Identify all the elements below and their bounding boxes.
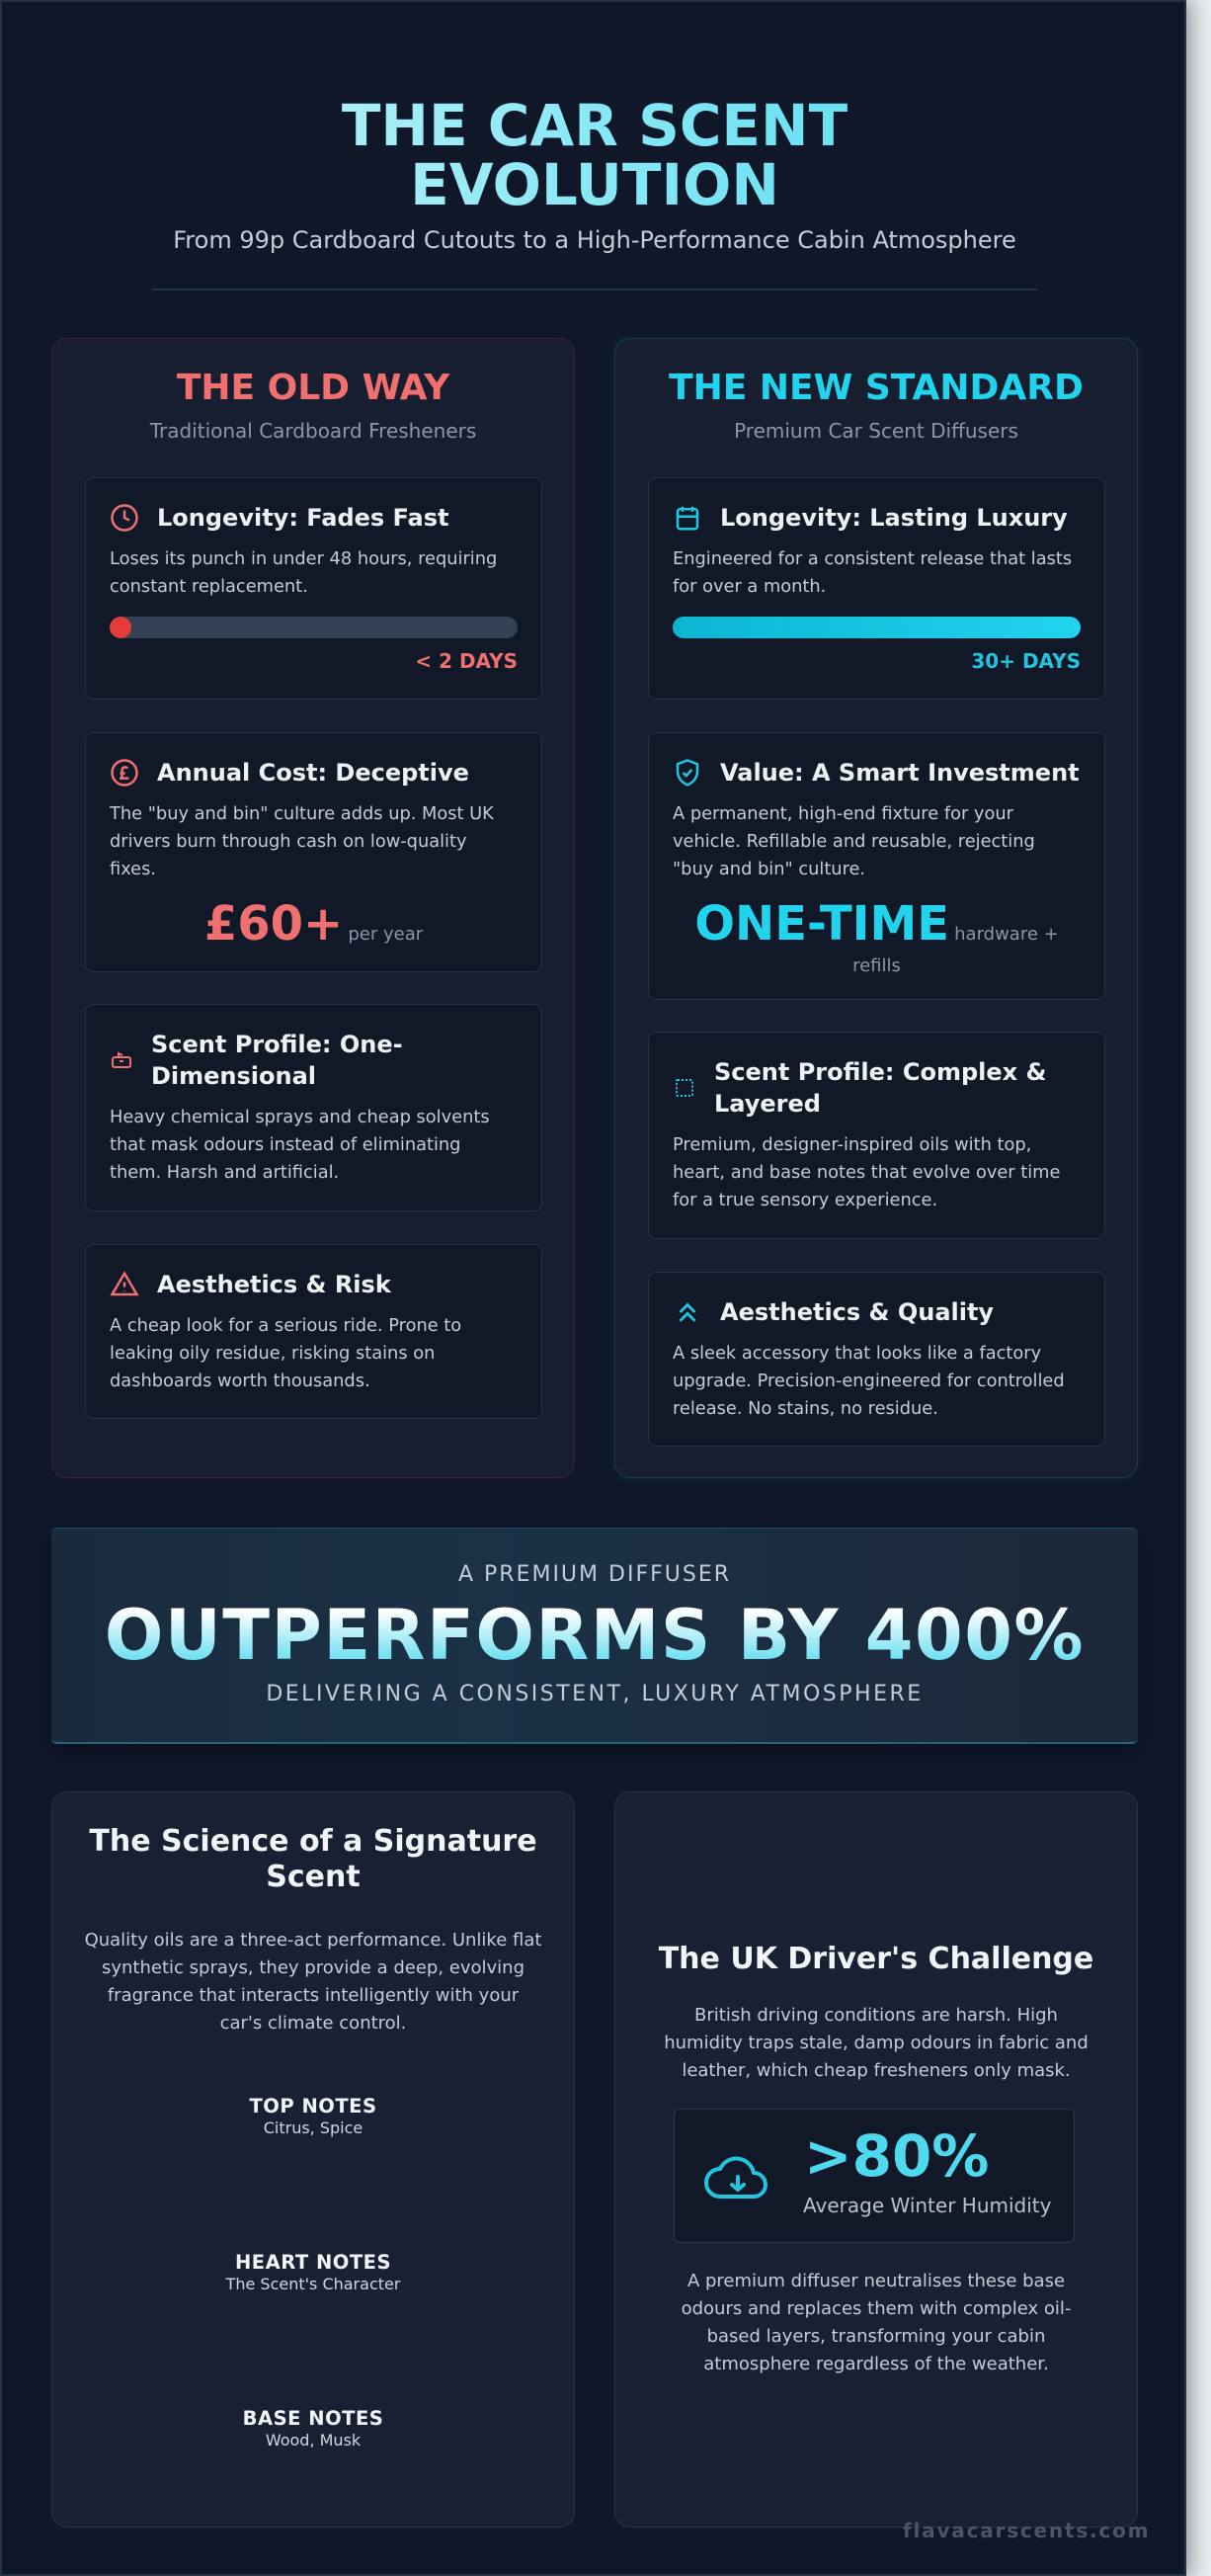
footer: website: flavacarscents.com: [903, 2519, 1150, 2542]
note: base: [243, 2407, 383, 2450]
icon: warning: Aesthetics & Risk: [157, 1271, 391, 1298]
heading: new standard: THE NEW STANDARD: [669, 368, 1084, 408]
stat: one-time: refills: [852, 956, 901, 976]
heading: science: Scent: [266, 1860, 361, 1894]
card: aesthetics risk: [85, 1244, 542, 1419]
title: EVOLUTION: [410, 151, 779, 218]
card: value: [648, 732, 1105, 1000]
card: scent profile complex: Premium, designer-inspired oils with top, heart, and base notes that evolve over time for a true sensory experience.: [673, 1134, 1060, 1210]
icon: pound: Annual Cost: Deceptive: [157, 759, 469, 787]
panel: new standard: [614, 338, 1138, 1478]
card: longevity lasting luxury: 30+ DAYS: [971, 649, 1081, 673]
card: annual cost: [85, 732, 542, 972]
banner subline: DELIVERING A CONSISTENT, LUXURY ATMOSPHERE: [266, 1682, 924, 1706]
icon: spray: [112, 1031, 403, 1090]
note: heart: [225, 2251, 401, 2293]
icon: layers: [676, 1058, 1046, 1118]
heading: uk challenge: The UK Driver's Challenge: [659, 1942, 1093, 1976]
note: heart: HEART NOTES: [235, 2251, 391, 2274]
heading: science: The Science of a Signature: [89, 1824, 537, 1859]
card: value: A permanent, high-end fixture for your vehicle. Refillable and reusable, rejecting "buy and bin" culture.: [673, 803, 1035, 879]
card: longevity lasting luxury: [648, 477, 1105, 700]
title: THE CAR SCENT: [342, 92, 848, 159]
note: top: Citrus, Spice: [264, 2119, 363, 2137]
icon: layers: Layered: [714, 1090, 821, 1118]
bar: under 2 days: [110, 617, 518, 638]
card: aesthetics quality: A sleek accessory that looks like a factory upgrade. Precision-engineered for controlled release. No stains, no residue.: [673, 1343, 1065, 1419]
text: science: car's climate control.: [220, 2013, 406, 2034]
note: heart: The Scent's Character: [226, 2275, 400, 2293]
icon: spray: Dimensional: [151, 1062, 316, 1090]
card: scent profile complex: [648, 1032, 1105, 1239]
icon: spray: Scent Profile: One-: [151, 1031, 403, 1058]
card: scent profile one-dimensional: [85, 1004, 542, 1211]
note: top: TOP NOTES: [249, 2095, 377, 2118]
stat: one-time: ONE-TIME hardware +: [694, 896, 1059, 952]
note: base: BASE NOTES: [243, 2407, 383, 2430]
text: uk challenge: British driving conditions are harsh. High humidity traps stale, damp odours in fabric and leather, which cheap fresheners only mask.: [664, 2005, 1089, 2081]
icon: cloud: [704, 2156, 767, 2199]
icon: clock: Longevity: Fades Fast: [157, 504, 448, 532]
icon: shield: Value: A Smart Investment: [720, 759, 1080, 787]
card: aesthetics quality: [648, 1272, 1105, 1447]
card: longevity fades fast: [85, 477, 542, 700]
icon: layers: Scent Profile: Complex &: [714, 1058, 1046, 1086]
panel: uk driver challenge: [614, 1791, 1138, 2528]
icon: calendar: Longevity: Lasting Luxury: [720, 504, 1068, 532]
subtitle: From 99p Cardboard Cutouts to a High-Performance Cabin Atmosphere: [173, 226, 1016, 254]
text: diffuser neutralises: A premium diffuser neutralises these base odours and replaces them with complex oil-based layers, transforming your cabin atmosphere regardless of the weather.: [682, 2271, 1071, 2374]
card: scent profile one-dimensional: Heavy chemical sprays and cheap solvents that mask odours instead of eliminating them. Harsh and artificial.: [110, 1107, 490, 1183]
card: longevity fades fast: Loses its punch in under 48 hours, requiring constant replacement.: [110, 548, 497, 597]
subheading: old way: Traditional Cardboard Fresheners: [150, 419, 476, 443]
card: aesthetics risk: A cheap look for a serious ride. Prone to leaking oily residue, risking stains on dashboards worth thousands.: [110, 1315, 461, 1391]
heading: science: [89, 1824, 537, 1894]
banner kicker: A PREMIUM DIFFUSER: [458, 1562, 731, 1587]
text: science: Quality oils are a three-act performance. Unlike flat synthetic sprays, they provide a deep, evolving fragrance that interacts intelligently with your: [85, 1930, 541, 2006]
stat: 80 percent: >80%: [804, 2122, 989, 2190]
bar: 30 days: [673, 617, 1081, 638]
card: longevity fades fast: < 2 DAYS: [415, 649, 518, 673]
stat: one-time: [694, 896, 1059, 976]
card: annual cost: The "buy and bin" culture adds up. Most UK drivers burn through cash on low-quality fixes.: [110, 803, 494, 879]
subheading: new standard: Premium Car Scent Diffusers: [734, 419, 1018, 443]
note: base: Wood, Musk: [266, 2431, 361, 2450]
title: [2, 96, 1187, 214]
heading: old way: THE OLD WAY: [177, 368, 449, 408]
banner: outperforms: [51, 1528, 1138, 1744]
stat: 60 per year: £60+ per year: [204, 896, 423, 952]
panel: science of scent: [51, 1791, 575, 2528]
stat box: humidity: [674, 2109, 1075, 2243]
card: longevity lasting luxury: Engineered for a consistent release that lasts for over a month.: [673, 548, 1072, 597]
icon: chevrons up: Aesthetics & Quality: [720, 1298, 994, 1326]
panel: old way: [51, 338, 575, 1478]
note: top: [249, 2095, 377, 2137]
stat label: Average Winter Humidity: [803, 2194, 1051, 2217]
banner headline: OUTPERFORMS BY 400%: [105, 1595, 1085, 1676]
